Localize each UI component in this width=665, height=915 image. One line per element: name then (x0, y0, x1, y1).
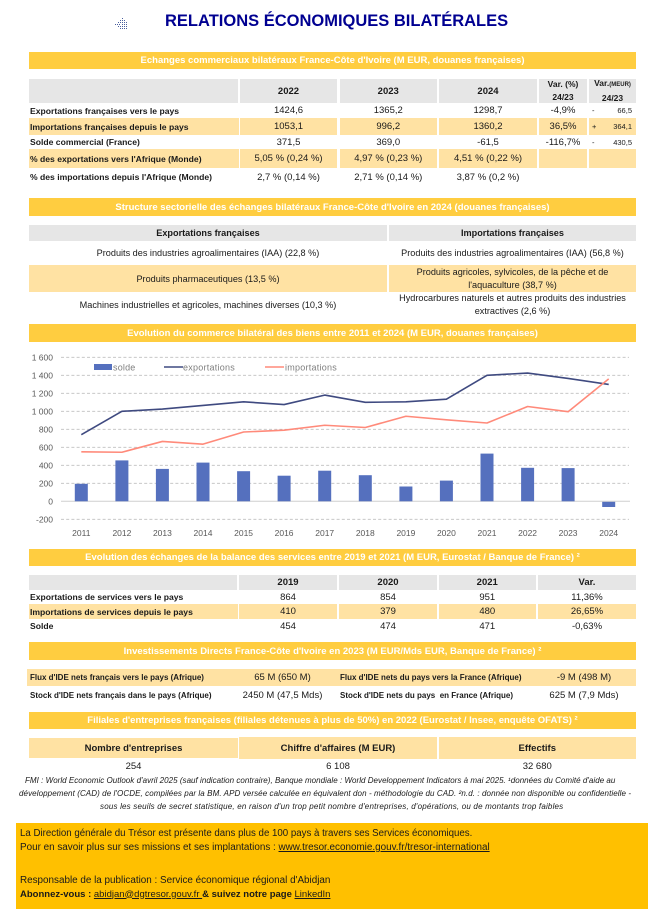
heading: sector structure: Structure sectorielle des échanges bilatéraux France-Côte d'Ivoire en 2024 (douanes françaises) (115, 202, 550, 212)
row: imports: Importations françaises depuis le pays (30, 122, 189, 132)
footnote: sous les seuils de secret statistique, en raison d'un trop petit nombre d'entreprises, d'opérations, ou de montants trop faibles (100, 802, 563, 811)
y axis labels: 1 600 (32, 352, 53, 362)
subsidiaries header: Nombre d'entreprises (85, 742, 182, 754)
table: bilateral trade (29, 78, 636, 182)
row: share of exports: 4,97 % (0,23 %) (354, 153, 422, 164)
table header row: 24/23 (552, 92, 574, 102)
row: trade balance (30, 136, 632, 148)
row: share of imports: 3,87 % (0,2 %) (457, 172, 519, 182)
sector table header: Importations françaises (461, 228, 564, 238)
row: share of imports: 2,7 % (0,14 %) (257, 172, 320, 182)
row: imports: 1360,2 (473, 121, 503, 132)
services header row (29, 575, 636, 590)
sector row 3 (80, 293, 626, 316)
row: services imports: 26,65% (571, 606, 603, 617)
row: trade balance: - (592, 138, 594, 146)
sector table header: Exportations françaises (156, 228, 260, 238)
row: services balance: -0,63% (572, 620, 602, 632)
table header row: Var. (%) (548, 78, 578, 88)
footnote (19, 776, 631, 811)
services header row: 2021 (477, 577, 498, 588)
heading: sector structure (29, 198, 636, 216)
importations line (81, 379, 609, 452)
y axis labels: 600 (39, 442, 53, 452)
heading: subsidiaries (29, 712, 636, 729)
row: services balance (30, 620, 602, 632)
heading: subsidiaries: Filiales d'entreprises françaises (filiales détenues à plus de 50%) en 2022 (Eurostat / Insee, enquête OFATS) ² (87, 715, 578, 726)
table header row: Var.(MEUR) (594, 78, 631, 88)
y axis labels (32, 352, 53, 524)
x axis labels: 2016 (275, 528, 294, 538)
table header row: 24/23 (602, 93, 623, 103)
row: trade balance: 430,5 (613, 138, 632, 146)
y axis labels: 400 (39, 460, 53, 470)
row: FDI stocks: 625 M (7,9 Mds) (549, 690, 619, 701)
subsidiaries values (126, 760, 552, 772)
solde bars (75, 454, 615, 507)
row: share of exports: % des exportations vers l'Afrique (Monde) (30, 154, 202, 164)
table: direct investment (27, 669, 636, 701)
row: share of exports: 4,51 % (0,22 %) (454, 153, 522, 164)
subsidiaries header: Effectifs (518, 742, 556, 754)
row: exports: 66,5 (617, 106, 632, 115)
title: RELATIONS ÉCONOMIQUES BILATÉRALES (165, 12, 508, 30)
services header row: 2020 (377, 577, 399, 588)
sector row 3: extractives (2,6 %) (475, 306, 550, 316)
legend (94, 362, 337, 372)
y axis labels: 0 (48, 496, 53, 506)
row: exports: -4,9% (551, 105, 575, 116)
row: exports: Exportations françaises vers le pays (30, 106, 179, 116)
legend: solde (113, 362, 136, 372)
subsidiaries values: 254 (126, 760, 141, 772)
sector row 2: Produits agricoles, sylvicoles, de la pêche et de (417, 266, 608, 276)
sector row 1: Produits des industries agroalimentaires (IAA) (22,8 %) (97, 248, 319, 258)
row: services exports: 951 (479, 592, 495, 602)
sector row 2 (29, 265, 636, 292)
heading: trade table: Echanges commerciaux bilatéraux France-Côte d'Ivoire (M EUR, douanes françaises) (141, 55, 524, 66)
row: share of imports: % des importations depuis l'Afrique (Monde) (30, 172, 212, 182)
row: imports: 36,5% (550, 121, 576, 132)
subsidiaries values: 32 680 (523, 760, 552, 772)
x axis labels (72, 528, 618, 538)
row: FDI flows: Flux d'IDE nets du pays vers la France (Afrique) (340, 673, 522, 682)
legend: exportations (183, 362, 235, 372)
heading: services balance (29, 549, 636, 566)
row: share of imports (30, 172, 519, 182)
row: trade balance: 371,5 (277, 136, 300, 148)
row: services imports: 379 (380, 606, 396, 617)
x axis labels: 2012 (112, 528, 132, 538)
table header row: 2022 (278, 86, 299, 96)
row: share of imports: 2,71 % (0,14 %) (354, 172, 422, 182)
services header row: 2019 (277, 577, 299, 588)
x axis labels: 2021 (478, 528, 497, 538)
row: FDI flows (27, 669, 636, 686)
subsidiaries header (29, 737, 636, 759)
x axis labels: 2015 (234, 528, 253, 538)
footnote: développement (CAD) de l'OCDE, compilées par la BM. APD versée calculée en équivalent don - méthodologie du CAD. ²n.d. : donnée non disponible ou confidentielle - (19, 789, 631, 798)
row: imports: 1053,1 (274, 121, 303, 132)
heading: services balance: Evolution des échanges de la balance des services entre 2019 et 2021 (M EUR, Eurostat / Banque de France) ² (85, 552, 580, 563)
row: share of exports: 5,05 % (0,24 %) (254, 153, 323, 164)
row: services exports: 854 (380, 592, 396, 602)
table: sector structure (29, 225, 636, 316)
table: subsidiaries (29, 737, 636, 772)
x axis labels: 2020 (437, 528, 456, 538)
row: services imports: 480 (479, 606, 495, 617)
x axis labels: 2024 (599, 528, 618, 538)
chart: bilateral goods trade 2011-2024 (32, 352, 630, 538)
row: imports (29, 118, 636, 135)
heading: trade table (29, 52, 636, 69)
sector row 2: Produits pharmaceutiques (13,5 %) (136, 274, 280, 284)
x axis labels: 2013 (153, 528, 172, 538)
heading: direct investment: Investissements Directs France-Côte d'Ivoire en 2023 (M EUR/Mds EUR, Banque de France) ² (124, 646, 541, 656)
row: services exports: 11,36% (571, 592, 603, 602)
row: share of exports (29, 149, 636, 168)
row: exports: 1298,7 (473, 105, 503, 116)
y axis labels: -200 (36, 514, 53, 524)
row: services balance: 471 (479, 620, 495, 632)
sector table header (29, 225, 636, 241)
row: services balance: 474 (380, 620, 396, 632)
footer text: presence (20, 828, 490, 852)
x axis labels: 2011 (72, 528, 91, 538)
sector row 2: l'aquaculture (38,7 %) (468, 280, 557, 290)
row: FDI flows: 65 M (650 M) (254, 672, 311, 683)
sector row 1 (97, 248, 624, 258)
sector row 3: Hydrocarbures naturels et autres produits des industries (399, 293, 626, 303)
row: exports: - (592, 106, 594, 115)
row: FDI stocks (30, 690, 619, 701)
row: services imports: 410 (280, 606, 296, 617)
footer text: presence: Pour en savoir plus sur ses missions et ses implantations : www.tresor.economie.gouv.fr/tresor-international (20, 842, 490, 852)
x axis labels: 2022 (518, 528, 537, 538)
row: FDI stocks: Stock d'IDE nets du pays en France (Afrique) (340, 691, 513, 700)
footer text: publication (20, 875, 330, 900)
table header row: 2024 (477, 86, 499, 96)
x axis labels: 2018 (356, 528, 375, 538)
icon: dotted logo (115, 18, 127, 29)
footer panel (16, 823, 648, 909)
sector row 1: Produits des industries agroalimentaires (IAA) (56,8 %) (401, 248, 624, 258)
x axis labels: 2017 (315, 528, 334, 538)
row: exports: 1424,6 (274, 105, 303, 116)
row: services imports: Importations de services depuis le pays (30, 606, 193, 616)
subsidiaries values: 6 108 (326, 760, 350, 772)
row: services balance: 454 (280, 620, 296, 632)
subsidiaries header: Chiffre d'affaires (M EUR) (281, 742, 395, 754)
row: exports (30, 105, 632, 116)
row: imports: 996,2 (376, 121, 400, 132)
exportations line (81, 373, 609, 435)
x axis labels: 2023 (559, 528, 578, 538)
sector row 3: Machines industrielles et agricoles, machines diverses (10,3 %) (80, 300, 336, 310)
row: FDI flows: Flux d'IDE nets français vers le pays (Afrique) (30, 673, 204, 682)
footnote: FMI : World Economic Outlook d'avril 2025 (sauf indication contraire), Banque mondiale : World Developpement Indicators à mai 2025. ¹données du Comité d'aide au (25, 776, 615, 785)
row: services exports: Exportations de services vers le pays (30, 592, 183, 602)
y axis labels: 800 (39, 424, 53, 434)
heading: direct investment (29, 642, 636, 660)
row: trade balance: -116,7% (546, 136, 580, 148)
table header row (29, 78, 636, 103)
y axis labels: 1 400 (32, 370, 53, 380)
x axis labels: 2014 (194, 528, 213, 538)
row: FDI stocks: 2450 M (47,5 Mds) (243, 690, 322, 701)
footer text: publication: Responsable de la publication : Service économique régional d'Abidjan (20, 875, 330, 886)
row: services exports: 864 (280, 592, 296, 602)
row: FDI flows: -9 M (498 M) (557, 672, 611, 683)
row: imports: 364,1 (613, 122, 632, 131)
row: services exports (30, 592, 603, 602)
row: trade balance: 369,0 (376, 136, 400, 148)
row: trade balance: Solde commercial (France) (30, 137, 140, 147)
table: services balance (29, 575, 636, 632)
y axis labels: 1 200 (32, 388, 53, 398)
heading: goods trade chart (29, 324, 636, 342)
footer text: presence: La Direction générale du Trésor est présente dans plus de 100 pays à travers ses Services économiques. (20, 828, 472, 839)
y axis labels: 1 000 (32, 406, 53, 416)
row: services balance: Solde (30, 621, 53, 631)
row: exports: 1365,2 (374, 105, 403, 116)
legend: importations (285, 362, 337, 372)
row: imports: + (592, 122, 596, 131)
heading: goods trade chart: Evolution du commerce bilatéral des biens entre 2011 et 2024 (M EUR, douanes françaises) (127, 328, 538, 338)
x axis labels: 2019 (396, 528, 416, 538)
row: services imports (29, 604, 636, 619)
row: trade balance: -61,5 (477, 136, 499, 148)
y axis labels: 200 (39, 478, 53, 488)
row: FDI stocks: Stock d'IDE nets français dans le pays (Afrique) (30, 691, 212, 700)
services header row: Var. (579, 577, 595, 588)
table header row: 2023 (378, 86, 399, 96)
footer text: publication: Abonnez-vous : abidjan@dgtresor.gouv.fr & suivez notre page LinkedIn (20, 888, 330, 900)
